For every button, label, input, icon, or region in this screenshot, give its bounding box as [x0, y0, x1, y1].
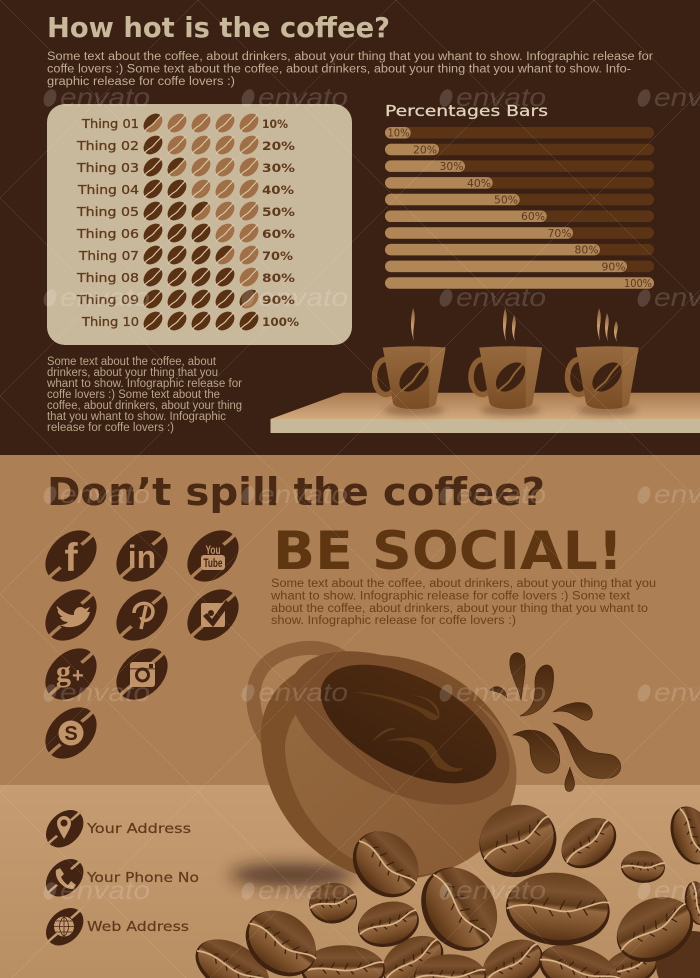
watermark: envato stamps: envato [60, 875, 150, 905]
row: thing 04: Thing 04 [77, 183, 139, 197]
bar chart: percentages: 20% [413, 144, 437, 156]
icon: linkedin bean [106, 520, 178, 592]
icon: linkedin bean: in [128, 539, 156, 575]
bar chart: percentages [385, 127, 654, 290]
row: thing 03: Thing 03 [76, 161, 139, 175]
text block: social paragraph: show. Infographic release for coffe lovers :) [271, 615, 516, 627]
row: thing 10: 100% [262, 315, 299, 329]
icon: youtube bean: Tube [204, 556, 223, 570]
row: thing 10 [81, 308, 299, 334]
panel: thing ratings [47, 104, 352, 345]
text block: social paragraph [270, 578, 656, 627]
text block: side paragraph: that you whant to show. Infographic [47, 411, 226, 423]
watermark: envato stamps [41, 82, 700, 905]
coffee swirl [352, 692, 463, 772]
cup rim [266, 620, 534, 836]
icon: youtube bean: You [206, 543, 220, 557]
watermark: envato stamps: envato [258, 479, 348, 509]
row: thing 07: 70% [262, 249, 294, 263]
panel: mid tan lower section background [0, 455, 700, 786]
row: thing 04 [77, 176, 295, 202]
row: thing 04: 40% [262, 183, 295, 197]
row: thing 09: 90% [262, 293, 296, 307]
bar chart: percentages: 100% [624, 278, 652, 290]
bar chart: percentages: 50% [494, 194, 518, 206]
bar chart: percentages: 70% [548, 228, 572, 240]
text block: side paragraph: drinkers, about your thing that you [47, 367, 218, 379]
row: thing 08 [76, 264, 296, 290]
text block: side paragraph: release for coffe lovers :) [47, 422, 174, 434]
icon: pile of coffee beans [186, 793, 700, 978]
contact: your phone number [39, 852, 199, 904]
title: how hot is the coffee: How hot is the coffee? [47, 12, 390, 44]
icon: skype bean [35, 697, 107, 769]
text block: side paragraph: whant to show. Infographic release for [46, 378, 242, 390]
text block: intro paragraph: Some text about the coffee, about drinkers, about your thing that you whant to show. Infographic release for [47, 51, 653, 63]
watermark: envato stamps: envato [456, 875, 546, 905]
row: thing 02 [76, 132, 296, 158]
icon: google plus bean: g [56, 655, 71, 688]
row: thing 05: Thing 05 [76, 205, 139, 219]
shelf [270, 393, 700, 433]
text block: side paragraph: coffee, about drinkers, about your thing [47, 400, 242, 412]
row: thing 08: 80% [262, 271, 296, 285]
heading: percentages bars: Percentages Bars [385, 102, 548, 120]
watermark: envato stamps: envato [456, 282, 546, 312]
cup body [261, 655, 516, 880]
icon: cup with three steam wisps [568, 308, 639, 416]
watermark: envato stamps: envato [60, 479, 150, 509]
row: thing 01 [81, 110, 288, 136]
text block: social paragraph: Some text about the coffee, about drinkers, about your thing that you [271, 578, 656, 590]
row: thing 10: Thing 10 [81, 315, 139, 329]
row: thing 05 [76, 198, 296, 224]
watermark: envato stamps: envato [456, 479, 546, 509]
row: thing 06 [76, 220, 296, 246]
icon: facebook bean [35, 520, 107, 592]
shadow under cup [230, 864, 354, 886]
row: thing 02: Thing 02 [76, 139, 139, 153]
watermark: envato stamps: envato [60, 677, 150, 707]
icon: twitter bean [35, 579, 107, 651]
text block: side paragraph: Some text about the coffee, about [47, 356, 217, 368]
bar chart: percentages: 90% [602, 261, 626, 273]
watermark: envato stamps: envato [456, 82, 546, 112]
icon: pinterest bean [106, 579, 178, 651]
bar chart: percentages: 30% [440, 161, 464, 173]
icon: big tipped coffee cup [230, 620, 534, 886]
heading: be social: BE SOCIAL! [273, 521, 623, 582]
contact: web address [39, 901, 189, 953]
icon: instagram bean [106, 638, 178, 710]
bar chart: percentages: 10% [388, 128, 410, 140]
text block: side paragraph [46, 356, 242, 434]
watermark: envato stamps: envato [60, 82, 150, 112]
panel: dark top section background [0, 0, 700, 456]
heading: don't spill the coffee: Don’t spill the coffee? [47, 470, 545, 515]
bar chart: percentages: 80% [574, 245, 599, 257]
contact: your address: Your Address [86, 821, 191, 837]
icon: google plus bean [35, 638, 107, 710]
row: thing 03 [76, 154, 296, 180]
text block: social paragraph: whant to show. Infographic release for coffe lovers :) Some text [270, 590, 631, 602]
text block: intro paragraph: coffe lovers :) Some text about the coffee, about drinkers, about your thing that you whant to show. Info- [47, 64, 631, 76]
icon: youtube bean [177, 520, 249, 592]
watermark: envato stamps: envato [456, 677, 546, 707]
watermark: envato stamps: envato [258, 282, 348, 312]
watermark: envato stamps: envato [60, 282, 150, 312]
text block: intro paragraph [47, 51, 653, 88]
icon: foursquare bean [177, 579, 249, 651]
icon: coffee splash drops [490, 653, 621, 792]
coffee surface [303, 640, 514, 808]
row: thing 07: Thing 07 [78, 249, 139, 263]
row: thing 02: 20% [262, 139, 296, 153]
row: thing 01: Thing 01 [81, 117, 139, 131]
row: thing 09 [76, 286, 296, 312]
watermark: envato stamps: envato [258, 677, 348, 707]
bar chart: percentages: 60% [521, 211, 545, 223]
icon: facebook bean: f [64, 536, 78, 580]
watermark: envato stamps: envato [258, 82, 348, 112]
icon: cup with one steam wisp [374, 308, 446, 416]
row: thing 05: 50% [262, 205, 296, 219]
row: thing 09: Thing 09 [76, 293, 139, 307]
panel: light tan table band [0, 785, 700, 978]
row: thing 03: 30% [262, 161, 296, 175]
watermark: envato stamps: envato [258, 875, 348, 905]
row: thing 07 [78, 242, 294, 268]
icon: google plus bean: + [72, 665, 84, 687]
icon: skype bean: S [64, 723, 78, 745]
row: thing 06: Thing 06 [76, 227, 139, 241]
text block: intro paragraph: graphic release for coffe lovers :) [47, 76, 235, 88]
row: thing 08: Thing 08 [76, 271, 139, 285]
contact: web address: Web Address [87, 919, 189, 935]
row: thing 06: 60% [262, 227, 296, 241]
contact: your phone number: Your Phone No [86, 870, 199, 886]
row: thing 01: 10% [262, 117, 288, 131]
icon: cup with two steam wisps [471, 308, 542, 416]
contact: your address [39, 803, 191, 855]
cup handle [253, 648, 346, 742]
text block: social paragraph: about the coffee, about drinkers, about your thing that you whant to [271, 603, 648, 615]
bar chart: percentages: 40% [467, 178, 491, 190]
text block: side paragraph: coffe lovers :) Some text about the [47, 389, 220, 401]
